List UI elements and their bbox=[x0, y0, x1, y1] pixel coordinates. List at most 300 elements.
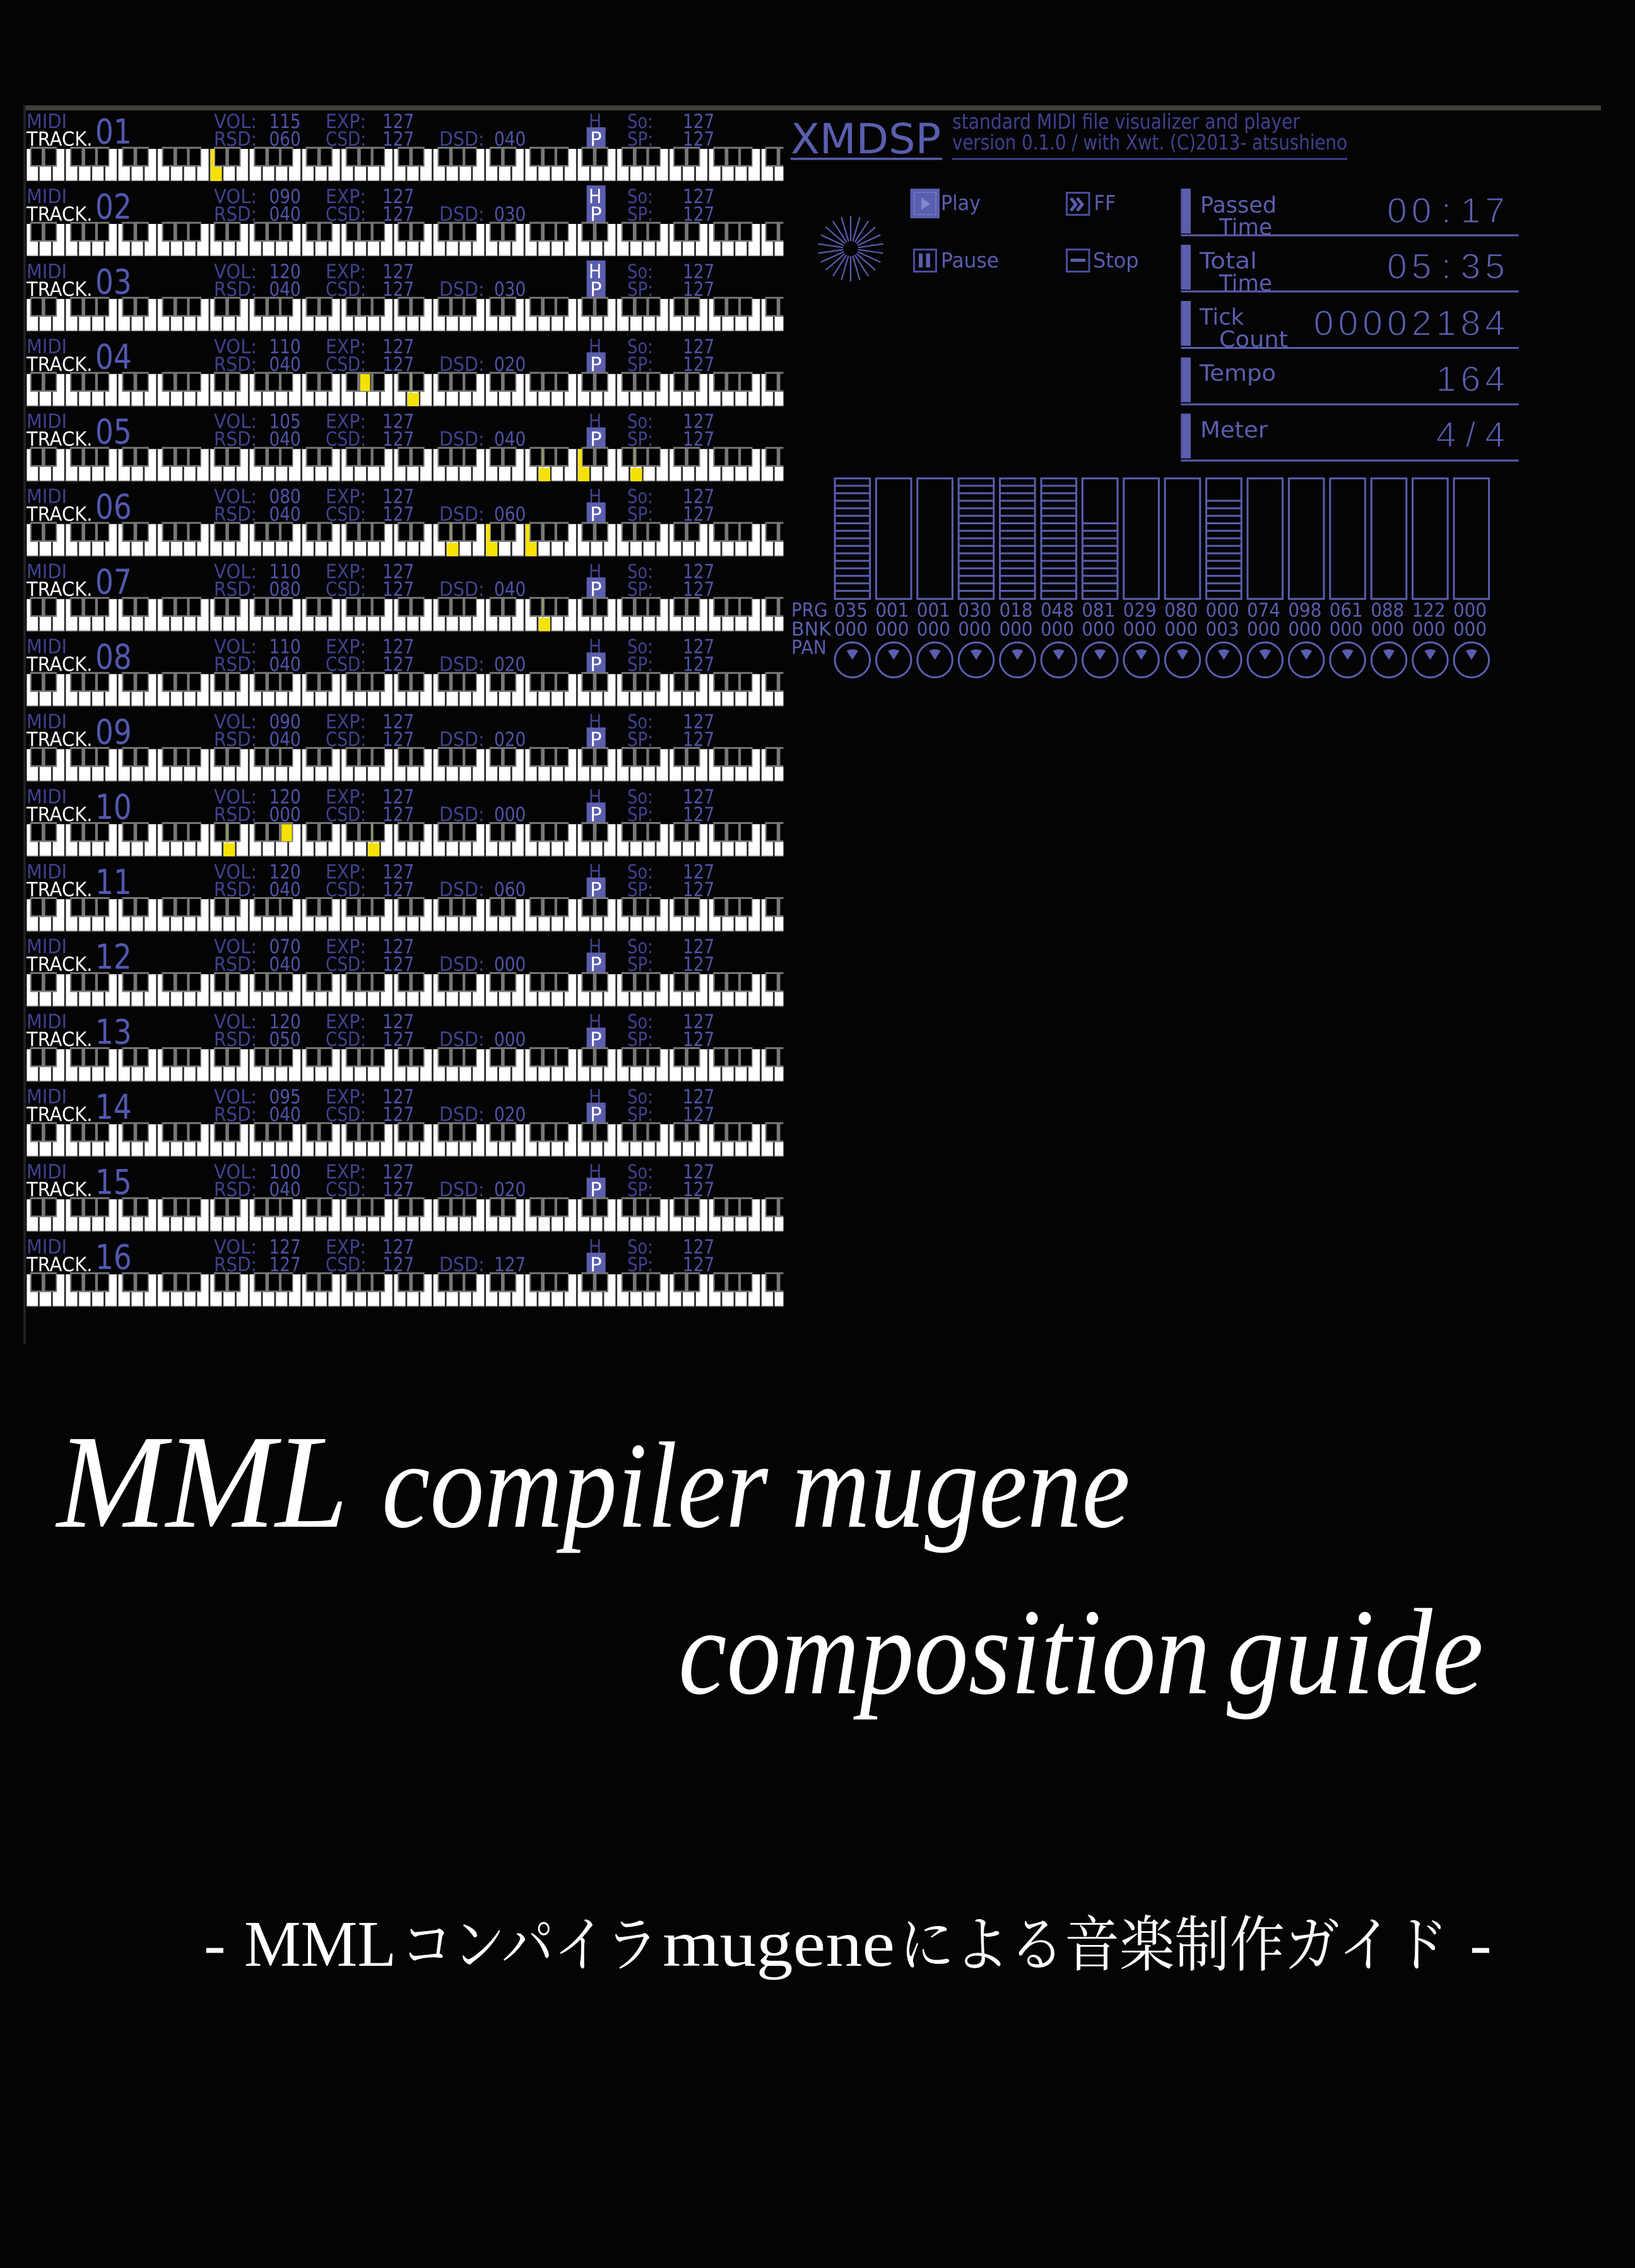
track 01 keyboard bbox=[27, 147, 854, 181]
bank numbers row: 000 bbox=[1000, 618, 1033, 640]
track 16 sostenuto and soft values: 127 bbox=[683, 1235, 714, 1258]
track 03 controller values: EXP: bbox=[326, 261, 366, 283]
track 12 controller values: 000 bbox=[494, 953, 526, 976]
track 01 hold and portamento flags bbox=[587, 110, 606, 151]
track 14 sostenuto and soft values: 127 bbox=[683, 1103, 714, 1126]
track 11 bbox=[26, 860, 854, 931]
track 01 active notes bbox=[211, 149, 222, 181]
track 10 sostenuto and soft values bbox=[627, 785, 714, 826]
window top bar bbox=[23, 105, 1601, 110]
track 12 label: MIDI bbox=[27, 936, 67, 959]
track 03 hold and portamento flags: P bbox=[590, 278, 602, 301]
track 02 controller values: 040 bbox=[269, 203, 301, 225]
track 10 controller values: 000 bbox=[494, 802, 526, 826]
track 02 controller values: 127 bbox=[382, 185, 414, 208]
track 13 controller values: EXP: bbox=[326, 1011, 366, 1034]
track 08 hold and portamento flags bbox=[587, 635, 606, 676]
track 14 controller values: DSD: bbox=[439, 1103, 485, 1126]
track 11 hold and portamento flags bbox=[587, 860, 606, 901]
pan label: PAN bbox=[791, 637, 827, 659]
bank numbers row: 000 bbox=[875, 618, 909, 640]
track 13 controller values: RSD: bbox=[214, 1028, 257, 1051]
track 16 controller values: 127 bbox=[382, 1253, 414, 1276]
track 07 keyboard bbox=[27, 597, 854, 632]
button: stop bbox=[1066, 248, 1138, 273]
title: composition bbox=[678, 1584, 1210, 1720]
title: guide bbox=[1227, 1584, 1484, 1720]
program numbers row: 018 bbox=[1000, 599, 1033, 621]
track 12 controller values: CSD: bbox=[326, 953, 366, 976]
track 07 hold and portamento flags: H bbox=[589, 560, 601, 583]
XMDSP logo: XMDSP bbox=[791, 115, 941, 163]
track 02 bbox=[26, 185, 854, 256]
app description bbox=[952, 109, 1347, 155]
track 02 label: MIDI bbox=[27, 185, 67, 208]
track 10 sostenuto and soft values: SP: bbox=[627, 802, 653, 826]
stat: meter: Meter bbox=[1200, 417, 1268, 443]
track 09 hold and portamento flags bbox=[587, 710, 606, 751]
window left edge bbox=[23, 105, 26, 1344]
track 12 controller values: 040 bbox=[269, 953, 301, 976]
channel 3 meter bbox=[918, 478, 952, 599]
track 14 controller values: 040 bbox=[269, 1103, 301, 1126]
track 04 label: MIDI bbox=[27, 336, 67, 358]
bank numbers row: 000 bbox=[834, 618, 868, 640]
stat: tempo: Tempo bbox=[1199, 361, 1276, 386]
track 01 sostenuto and soft values: So: bbox=[627, 110, 653, 133]
program numbers row: 080 bbox=[1164, 599, 1198, 621]
track 10 controller values: 127 bbox=[382, 802, 414, 826]
track 04 label: 04 bbox=[95, 337, 132, 377]
track 06 controller values: 040 bbox=[269, 503, 301, 526]
track 14 controller values: 127 bbox=[382, 1085, 414, 1108]
track 11 controller values: CSD: bbox=[326, 878, 366, 901]
track 08 label bbox=[26, 636, 132, 677]
track 14 controller values: RSD: bbox=[214, 1103, 257, 1125]
track 13 controller values: 127 bbox=[382, 1028, 414, 1051]
stat: total time bbox=[1181, 245, 1519, 297]
track 14 sostenuto and soft values: SP: bbox=[627, 1103, 653, 1126]
track 08 sostenuto and soft values: So: bbox=[627, 635, 653, 658]
track 08 controller values: 127 bbox=[382, 652, 414, 676]
track 10 active notes bbox=[223, 822, 379, 856]
program numbers row: PRG bbox=[791, 599, 828, 621]
track 09 sostenuto and soft values: So: bbox=[627, 710, 653, 733]
track 13 label: 13 bbox=[95, 1013, 132, 1052]
stat: meter bbox=[1181, 414, 1519, 462]
track 05 controller values: RSD: bbox=[214, 428, 257, 450]
track 04 keyboard bbox=[27, 372, 854, 406]
track 03 controller values: 030 bbox=[494, 278, 526, 300]
track 15 controller values bbox=[214, 1160, 526, 1201]
track 09 sostenuto and soft values: 127 bbox=[683, 727, 714, 751]
track 03 label: 03 bbox=[95, 262, 132, 302]
track 13 sostenuto and soft values: So: bbox=[627, 1011, 653, 1033]
track 15 controller values: 040 bbox=[269, 1178, 301, 1201]
track 11 controller values: 040 bbox=[269, 878, 301, 901]
track 09 controller values: 020 bbox=[494, 727, 526, 751]
track 16 controller values: 127 bbox=[382, 1235, 414, 1258]
track 16 sostenuto and soft values bbox=[627, 1235, 714, 1276]
track 01 bbox=[26, 110, 854, 181]
program numbers row: 035 bbox=[834, 599, 868, 621]
track 05 hold and portamento flags bbox=[587, 410, 606, 451]
track 03 controller values: DSD: bbox=[439, 278, 485, 301]
track 03 hold and portamento flags bbox=[587, 260, 606, 301]
track 05 label bbox=[26, 411, 132, 452]
stat: tick count bbox=[1181, 301, 1519, 353]
subtitle: - bbox=[1470, 1908, 1492, 1980]
subtitle: による音楽制作ガイド bbox=[899, 1912, 1448, 1979]
track 11 controller values: 127 bbox=[382, 860, 414, 883]
track 11 controller values bbox=[214, 860, 526, 902]
track 16 keyboard bbox=[27, 1272, 854, 1307]
track 01 controller values: 040 bbox=[494, 127, 526, 151]
track 13 controller values bbox=[214, 1010, 526, 1051]
track 14 controller values: CSD: bbox=[326, 1103, 366, 1126]
track 15 sostenuto and soft values: SP: bbox=[627, 1178, 653, 1201]
app description: version 0.1.0 / with Xwt. (C)2013- atsushieno bbox=[952, 130, 1347, 155]
track 12 controller values bbox=[214, 935, 526, 977]
stat: tick count: Tick bbox=[1199, 304, 1244, 330]
track 02 sostenuto and soft values: So: bbox=[627, 185, 653, 208]
channel 16 meter bbox=[1454, 478, 1489, 599]
track 15 controller values: 127 bbox=[382, 1160, 414, 1184]
track 07 controller values: 080 bbox=[269, 577, 301, 601]
track 16 controller values: DSD: bbox=[439, 1254, 485, 1276]
track 05 label: TRACK. bbox=[26, 428, 92, 451]
track 08 controller values: DSD: bbox=[439, 653, 485, 676]
track 07 controller values: DSD: bbox=[439, 578, 485, 601]
track 08 controller values: 040 bbox=[269, 652, 301, 676]
track 06 controller values: 060 bbox=[494, 503, 526, 526]
track 13 hold and portamento flags: P bbox=[590, 1028, 602, 1051]
track 07 controller values: 127 bbox=[382, 560, 414, 583]
chart: channel level meters bbox=[835, 478, 1489, 599]
stat: total time: Total bbox=[1199, 249, 1257, 274]
track 04 controller values: 040 bbox=[269, 353, 301, 375]
bank numbers row: 000 bbox=[1123, 618, 1157, 640]
track 14 keyboard bbox=[27, 1122, 854, 1156]
track 08 sostenuto and soft values: SP: bbox=[627, 652, 653, 676]
track 15 hold and portamento flags bbox=[587, 1160, 606, 1201]
track 11 label: MIDI bbox=[27, 861, 67, 884]
track 10 controller values: 120 bbox=[269, 785, 301, 808]
track 01 sostenuto and soft values bbox=[627, 110, 714, 151]
track 16 sostenuto and soft values: SP: bbox=[627, 1253, 653, 1276]
bank numbers row: 000 bbox=[1330, 618, 1363, 640]
track 15 sostenuto and soft values: 127 bbox=[683, 1178, 714, 1201]
track 03 controller values: VOL: bbox=[214, 261, 257, 283]
track 01 controller values: 127 bbox=[382, 110, 414, 133]
track 15 controller values: RSD: bbox=[214, 1178, 257, 1201]
track 01 controller values bbox=[214, 110, 526, 151]
track 03 sostenuto and soft values: 127 bbox=[683, 260, 714, 283]
program numbers row: 000 bbox=[1206, 599, 1239, 621]
program numbers row: 001 bbox=[875, 599, 909, 621]
track 02 hold and portamento flags: H bbox=[589, 185, 601, 208]
program numbers row: 030 bbox=[958, 599, 991, 621]
button: fast forward bbox=[1066, 191, 1116, 215]
track 14 label: TRACK. bbox=[26, 1103, 92, 1126]
title: MML bbox=[55, 1407, 348, 1556]
track 11 controller values: RSD: bbox=[214, 878, 257, 901]
track 13 label: TRACK. bbox=[26, 1028, 92, 1051]
track 16 controller values bbox=[214, 1235, 526, 1276]
track 02 controller values: RSD: bbox=[214, 203, 257, 225]
panel: MIDI tracks bbox=[26, 110, 854, 1307]
panel: transport buttons bbox=[910, 189, 1138, 273]
track 05 controller values: 127 bbox=[382, 428, 414, 450]
track 09 controller values: RSD: bbox=[214, 728, 257, 751]
track 14 controller values: 127 bbox=[382, 1103, 414, 1126]
track 15 controller values: 020 bbox=[494, 1178, 526, 1201]
track 08 controller values: RSD: bbox=[214, 653, 257, 676]
track 08 keyboard bbox=[27, 672, 854, 707]
description underline bbox=[952, 158, 1347, 160]
track 08 hold and portamento flags: H bbox=[589, 635, 601, 658]
program numbers row: 098 bbox=[1288, 599, 1321, 621]
track 08 sostenuto and soft values: 127 bbox=[683, 635, 714, 658]
track 13 sostenuto and soft values: SP: bbox=[627, 1028, 653, 1051]
track 05 keyboard bbox=[27, 447, 854, 481]
track 14 label bbox=[26, 1086, 132, 1127]
track 07 hold and portamento flags: P bbox=[590, 579, 602, 601]
track 14 bbox=[26, 1085, 854, 1156]
button: play: Play bbox=[941, 191, 981, 215]
track 07 label: MIDI bbox=[27, 561, 67, 584]
track 15 sostenuto and soft values bbox=[627, 1160, 714, 1201]
track 10 label bbox=[26, 785, 132, 827]
channel 7 meter bbox=[1082, 478, 1118, 599]
track 09 controller values: CSD: bbox=[326, 727, 366, 751]
track 13 bbox=[26, 1010, 854, 1081]
bank numbers row: 000 bbox=[917, 618, 950, 640]
track 03 controller values: CSD: bbox=[326, 278, 366, 300]
track 10 controller values: CSD: bbox=[326, 802, 366, 826]
track 09 sostenuto and soft values bbox=[627, 710, 714, 751]
track 10 label: MIDI bbox=[27, 785, 67, 809]
title bbox=[55, 1407, 1484, 1720]
track 11 sostenuto and soft values: SP: bbox=[627, 878, 653, 901]
channel 8 meter bbox=[1124, 478, 1159, 599]
track 02 sostenuto and soft values: 127 bbox=[683, 185, 714, 208]
track 06 label: 06 bbox=[95, 487, 132, 527]
track 08 sostenuto and soft values bbox=[627, 635, 714, 676]
track 06 label: TRACK. bbox=[26, 503, 92, 526]
track 12 sostenuto and soft values bbox=[627, 935, 714, 976]
button: fast forward: FF bbox=[1094, 191, 1116, 215]
track 10 hold and portamento flags: H bbox=[589, 785, 601, 808]
track 04 hold and portamento flags: P bbox=[590, 353, 602, 376]
track 04 controller values: 020 bbox=[494, 353, 526, 375]
track 08 hold and portamento flags: P bbox=[590, 654, 602, 676]
bank numbers row: 000 bbox=[1288, 618, 1321, 640]
track 15 hold and portamento flags: H bbox=[589, 1160, 601, 1183]
track 06 hold and portamento flags: P bbox=[590, 503, 602, 526]
track 11 sostenuto and soft values: 127 bbox=[683, 860, 714, 883]
track 15 bbox=[26, 1160, 854, 1231]
track 11 label: 11 bbox=[95, 862, 132, 902]
track 14 controller values: EXP: bbox=[326, 1086, 366, 1108]
track 13 sostenuto and soft values: 127 bbox=[683, 1028, 714, 1051]
track 10 sostenuto and soft values: 127 bbox=[683, 802, 714, 826]
track 16 controller values: VOL: bbox=[214, 1236, 257, 1259]
channel 9 meter bbox=[1165, 478, 1200, 599]
track 04 active notes bbox=[360, 372, 419, 406]
track 03 label bbox=[26, 261, 132, 302]
track 15 controller values: 100 bbox=[269, 1160, 301, 1184]
channel 12 meter bbox=[1289, 478, 1324, 599]
track 04 controller values: VOL: bbox=[214, 336, 257, 358]
track 09 controller values bbox=[214, 710, 526, 751]
track 13 controller values: 120 bbox=[269, 1010, 301, 1033]
button: stop: Stop bbox=[1093, 248, 1138, 273]
program numbers row: 000 bbox=[1453, 599, 1487, 621]
track 01 controller values: VOL: bbox=[214, 110, 257, 133]
track 14 hold and portamento flags: H bbox=[589, 1085, 601, 1108]
track 05 controller values: 105 bbox=[269, 410, 301, 433]
track 02 controller values: 030 bbox=[494, 203, 526, 225]
track 12 controller values: 127 bbox=[382, 935, 414, 958]
track 12 hold and portamento flags: H bbox=[589, 935, 601, 958]
track 16 label bbox=[26, 1236, 132, 1277]
stat: passed time: Passed bbox=[1200, 192, 1277, 218]
subtitle: コンパイラ bbox=[401, 1912, 658, 1979]
program numbers row: 122 bbox=[1412, 599, 1446, 621]
track 03 hold and portamento flags: H bbox=[589, 260, 601, 283]
track 15 sostenuto and soft values: 127 bbox=[683, 1160, 714, 1184]
track 05 controller values: 040 bbox=[269, 428, 301, 450]
track 08 sostenuto and soft values: 127 bbox=[683, 652, 714, 676]
track 06 controller values: 127 bbox=[382, 503, 414, 526]
track 09 hold and portamento flags: P bbox=[590, 728, 602, 751]
track 07 controller values: EXP: bbox=[326, 560, 366, 584]
track 08 controller values: VOL: bbox=[214, 636, 257, 659]
track 03 controller values: 040 bbox=[269, 278, 301, 300]
track 09 label: MIDI bbox=[27, 710, 67, 734]
track 16 hold and portamento flags: H bbox=[589, 1235, 601, 1258]
track 12 sostenuto and soft values: So: bbox=[627, 936, 653, 958]
bank numbers row: 000 bbox=[1371, 618, 1404, 640]
track 03 sostenuto and soft values: SP: bbox=[627, 278, 653, 300]
track 09 sostenuto and soft values: 127 bbox=[683, 710, 714, 733]
track 14 hold and portamento flags: P bbox=[590, 1103, 602, 1126]
track 14 label: 14 bbox=[95, 1088, 132, 1127]
track 16 sostenuto and soft values: 127 bbox=[683, 1253, 714, 1276]
bank numbers row: 000 bbox=[1412, 618, 1446, 640]
track 08 label: MIDI bbox=[27, 636, 67, 659]
track 12 controller values: 127 bbox=[382, 953, 414, 976]
track 02 hold and portamento flags bbox=[587, 185, 606, 226]
track 09 controller values: 127 bbox=[382, 727, 414, 751]
track 11 hold and portamento flags: H bbox=[589, 860, 601, 883]
track 13 controller values: DSD: bbox=[439, 1028, 485, 1051]
track 02 label: 02 bbox=[95, 187, 132, 226]
track 03 label: TRACK. bbox=[26, 278, 92, 301]
track 03 controller values: 120 bbox=[269, 260, 301, 283]
track 16 controller values: 127 bbox=[269, 1253, 301, 1276]
track 05 controller values: 040 bbox=[494, 428, 526, 450]
track 01 label bbox=[26, 110, 132, 151]
track 07 label: TRACK. bbox=[26, 579, 92, 601]
track 16 controller values: 127 bbox=[269, 1235, 301, 1258]
track 10 controller values: 127 bbox=[382, 785, 414, 808]
track 09 controller values: 040 bbox=[269, 727, 301, 751]
channel 13 meter bbox=[1330, 478, 1365, 599]
track 16 bbox=[26, 1235, 854, 1307]
track 05 label: MIDI bbox=[27, 411, 67, 433]
track 10 controller values: DSD: bbox=[439, 803, 485, 826]
track 08 label: 08 bbox=[95, 637, 132, 677]
track 06 label: MIDI bbox=[27, 486, 67, 508]
track 10 controller values: 000 bbox=[269, 802, 301, 826]
track 03 sostenuto and soft values: 127 bbox=[683, 278, 714, 300]
track 03 sostenuto and soft values bbox=[627, 260, 714, 300]
panel: playback stats bbox=[1181, 189, 1519, 462]
stat: total time: 05:35 bbox=[1387, 247, 1505, 287]
track 07 sostenuto and soft values: 127 bbox=[683, 560, 714, 583]
bank numbers row bbox=[791, 618, 1487, 640]
track 04 sostenuto and soft values: So: bbox=[627, 335, 653, 358]
app description: standard MIDI file visualizer and player bbox=[952, 109, 1300, 134]
track 09 label: TRACK. bbox=[26, 729, 92, 751]
track 04 controller values: 127 bbox=[382, 335, 414, 358]
track 07 sostenuto and soft values: 127 bbox=[683, 577, 714, 601]
track 16 label: MIDI bbox=[27, 1236, 67, 1259]
track 14 sostenuto and soft values: So: bbox=[627, 1086, 653, 1108]
track 06 controller values: VOL: bbox=[214, 486, 257, 508]
track 14 controller values: VOL: bbox=[214, 1086, 257, 1108]
track 08 controller values: 110 bbox=[269, 635, 301, 658]
track 12 controller values: EXP: bbox=[326, 936, 366, 959]
track 14 controller values: 095 bbox=[269, 1085, 301, 1108]
track 05 sostenuto and soft values: So: bbox=[627, 410, 653, 433]
track 06 sostenuto and soft values: So: bbox=[627, 485, 653, 508]
bank numbers row: 000 bbox=[1453, 618, 1487, 640]
track 04 controller values: 127 bbox=[382, 353, 414, 375]
track 14 label: MIDI bbox=[27, 1086, 67, 1108]
track 04 sostenuto and soft values: SP: bbox=[627, 353, 653, 375]
track 10 hold and portamento flags: P bbox=[590, 803, 602, 826]
track 01 sostenuto and soft values: SP: bbox=[627, 127, 653, 151]
track 02 controller values: VOL: bbox=[214, 185, 257, 208]
track 15 controller values: VOL: bbox=[214, 1161, 257, 1184]
channel 11 meter bbox=[1248, 478, 1283, 599]
channel 14 meter bbox=[1371, 478, 1407, 599]
track 04 hold and portamento flags: H bbox=[589, 335, 601, 358]
track 11 controller values: 120 bbox=[269, 860, 301, 883]
track 08 controller values: EXP: bbox=[326, 635, 366, 659]
track 10 label: TRACK. bbox=[26, 803, 92, 826]
track 07 controller values: CSD: bbox=[326, 577, 366, 601]
track 09 keyboard bbox=[27, 747, 854, 781]
track 09 bbox=[26, 710, 854, 781]
track 10 bbox=[26, 785, 854, 856]
track 10 sostenuto and soft values: So: bbox=[627, 785, 653, 808]
stat: tempo: 164 bbox=[1436, 359, 1505, 399]
track 06 controller values: 127 bbox=[382, 485, 414, 508]
track 07 controller values: RSD: bbox=[214, 578, 257, 601]
track 01 controller values: CSD: bbox=[326, 127, 366, 151]
track 04 sostenuto and soft values: 127 bbox=[683, 335, 714, 358]
track 14 sostenuto and soft values bbox=[627, 1085, 714, 1126]
stat: tick count: 00002184 bbox=[1314, 303, 1505, 343]
track 13 label: MIDI bbox=[27, 1011, 67, 1033]
track 11 sostenuto and soft values: So: bbox=[627, 861, 653, 883]
track 07 active notes bbox=[539, 597, 550, 632]
track 12 controller values: 070 bbox=[269, 935, 301, 958]
